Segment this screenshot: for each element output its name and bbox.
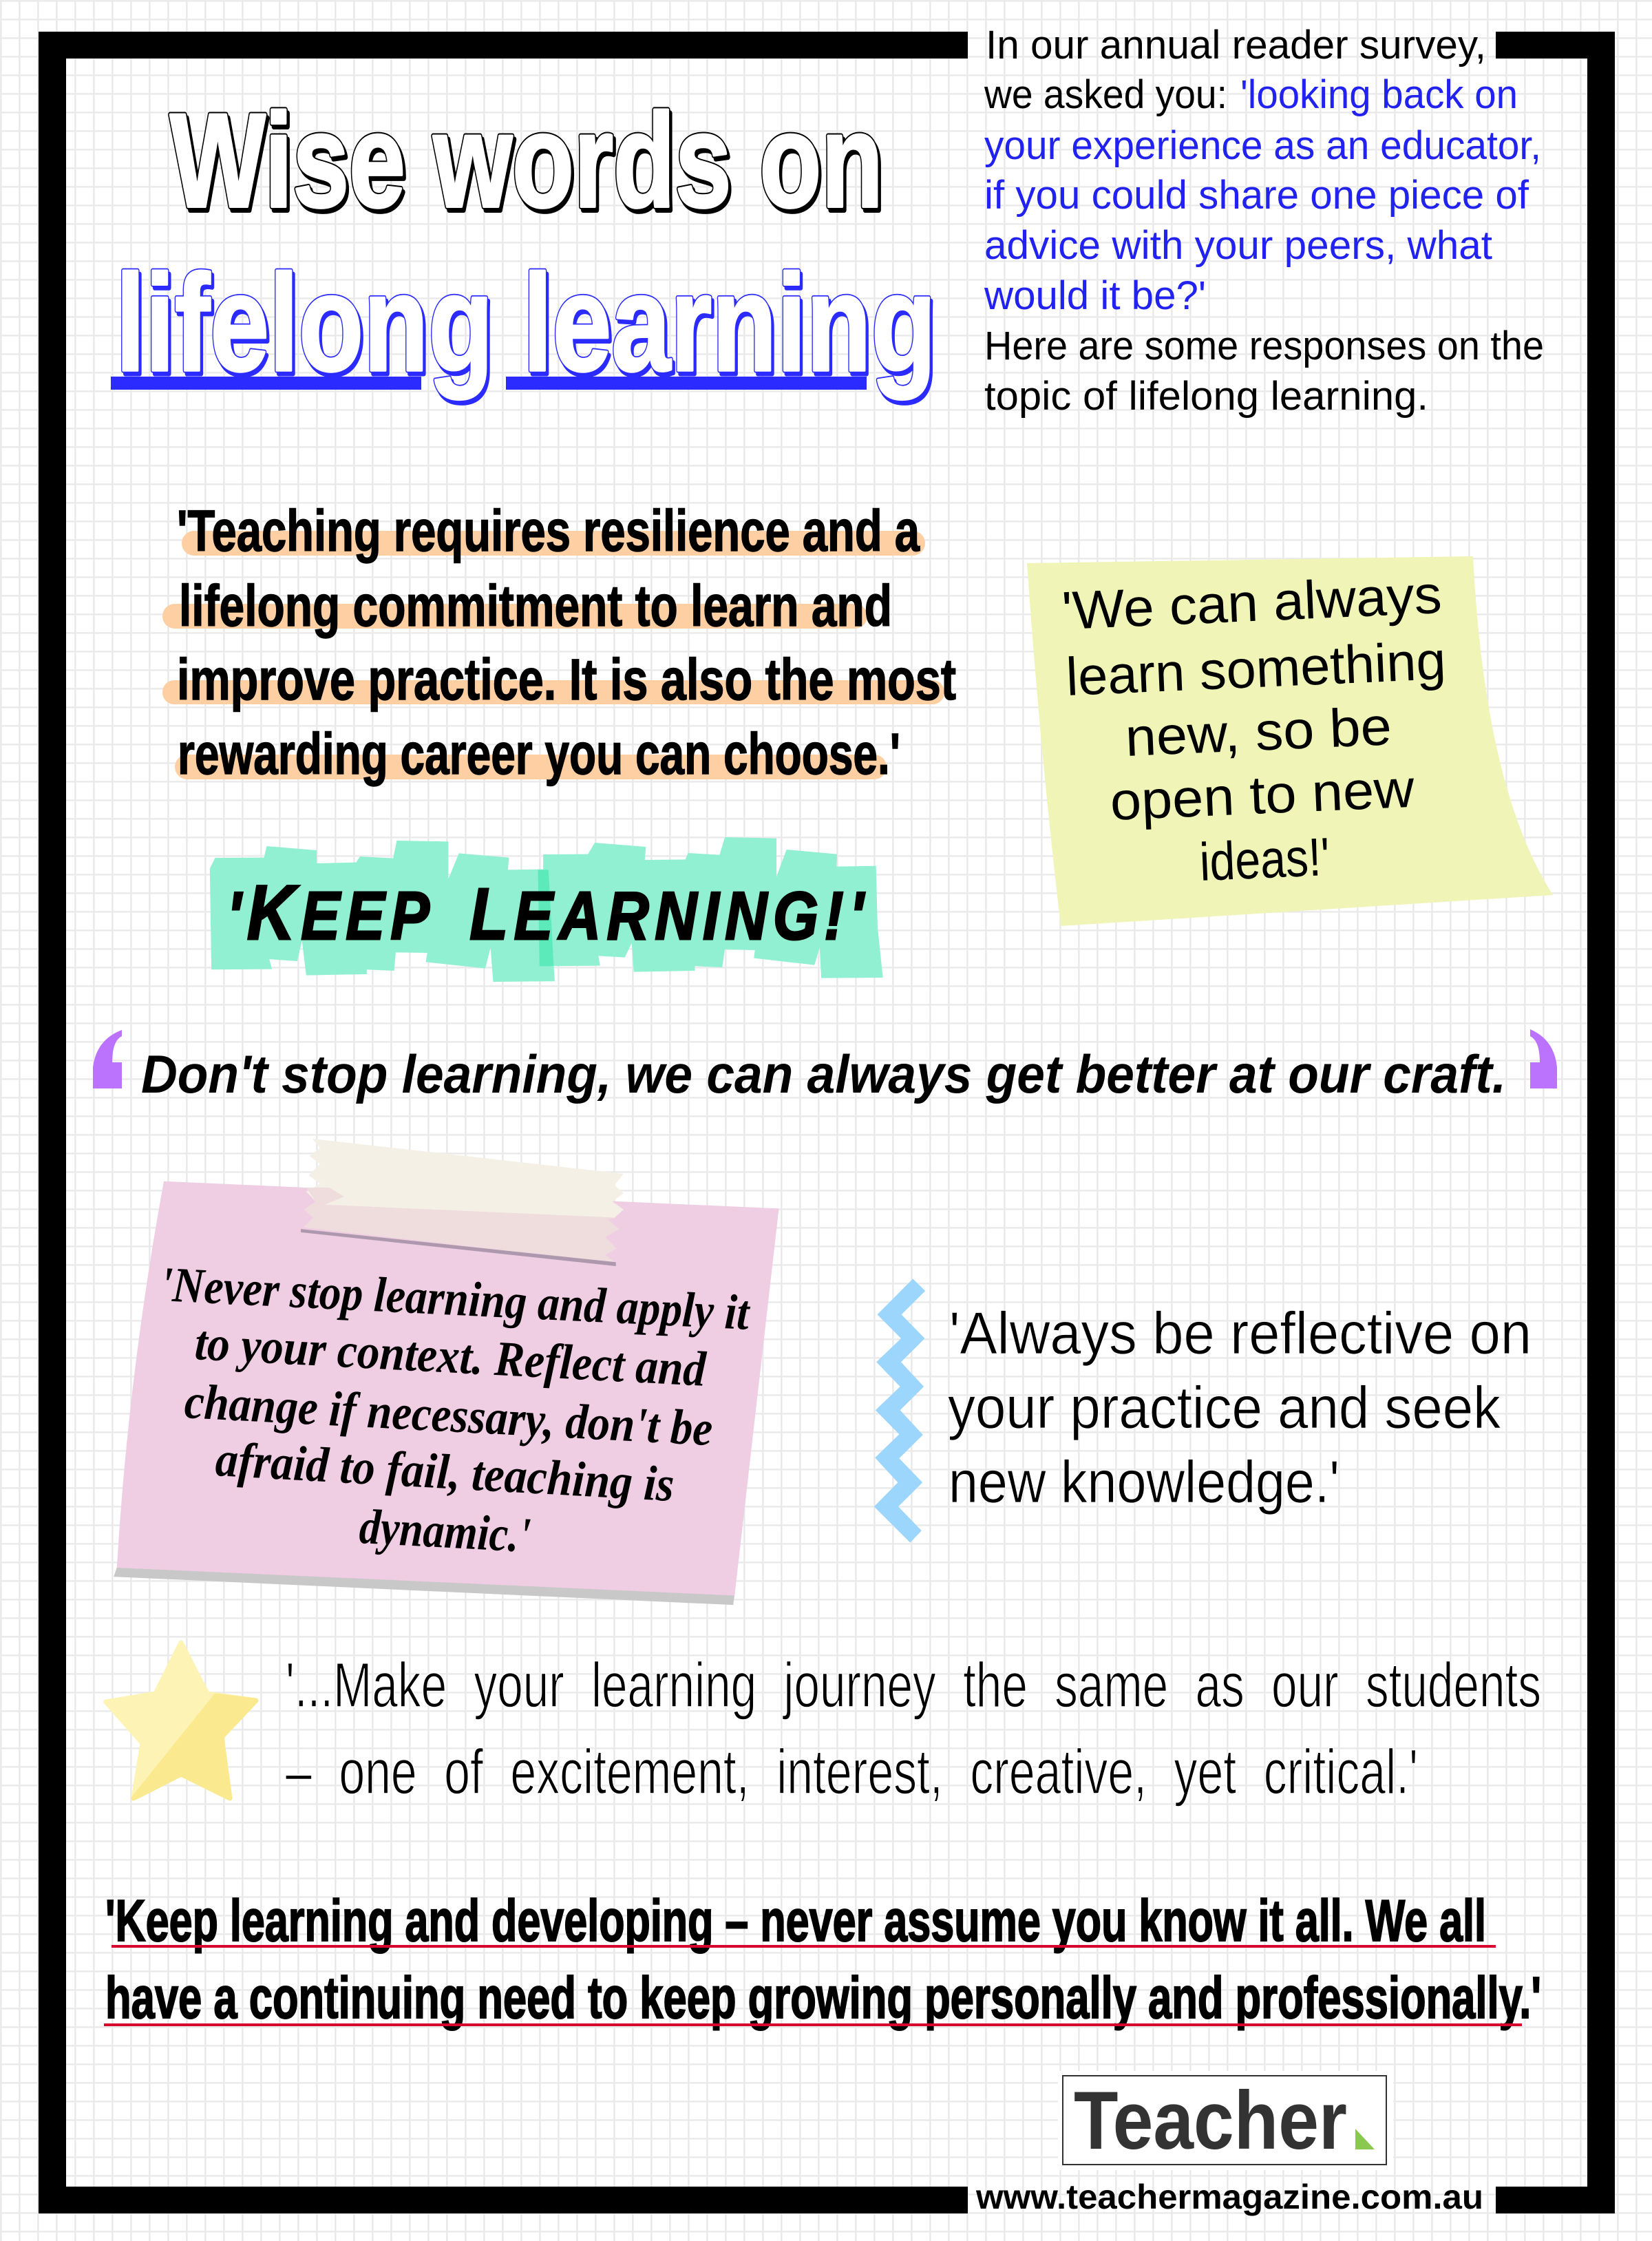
intro text block: Here are some responses on the xyxy=(984,324,1544,368)
quote: resilience with orange highlights xyxy=(162,498,956,786)
title line: Wise words on: Wise words on xyxy=(172,90,885,239)
title line: Wise words on: Wise words on xyxy=(170,86,883,235)
note text: change if necessary, don't be xyxy=(183,1374,714,1456)
title line: lifelong learning: lifelong learning xyxy=(116,246,936,400)
note text: afraid to fail, teaching is xyxy=(214,1431,676,1512)
intro text block: topic of lifelong learning. xyxy=(984,374,1428,419)
note text: ideas!' xyxy=(1198,826,1331,892)
note text xyxy=(1061,564,1447,892)
logo: Teacher: Teacher xyxy=(1074,2074,1347,2167)
quote text xyxy=(105,1888,1541,2031)
note paper xyxy=(1027,556,1553,926)
website url: www.teachermagazine.com.au xyxy=(975,2178,1483,2216)
title xyxy=(111,86,938,403)
intro text block: would it be?' xyxy=(984,273,1206,318)
quote: always be reflective xyxy=(948,1301,1532,1515)
note paper and tape xyxy=(114,1139,779,1605)
quote text xyxy=(177,498,956,786)
note text xyxy=(159,1256,752,1563)
pull quote with purple brackets xyxy=(93,1029,1557,1104)
intro text block: your experience as an educator, xyxy=(984,123,1541,168)
note text: learn something xyxy=(1065,630,1447,707)
title line: lifelong learning: lifelong learning xyxy=(118,250,938,403)
intro text block: In our annual reader survey, xyxy=(986,23,1486,67)
title underline bars xyxy=(111,377,867,390)
note text: open to new xyxy=(1109,758,1416,832)
title line: lifelong learning: lifelong learning xyxy=(116,246,936,400)
quote text: rewarding career you can choose.' xyxy=(178,722,900,786)
intro text block: advice with your peers, what xyxy=(984,223,1492,268)
icon: yellow star xyxy=(106,1643,256,1798)
green tape strips xyxy=(210,837,883,982)
note text: 'Never stop learning and apply it xyxy=(159,1256,752,1340)
pink taped note xyxy=(114,1139,779,1605)
callout text: 'KEEP LEARNING!' xyxy=(227,870,869,956)
red underlines xyxy=(104,1945,1522,2026)
intro text block: 'looking back on xyxy=(1240,72,1518,117)
intro text block: we asked you: xyxy=(984,72,1227,117)
quote: always be reflective: your practice and seek xyxy=(948,1375,1501,1441)
note text: 'We can always xyxy=(1061,564,1443,641)
note text: dynamic.' xyxy=(358,1499,532,1563)
icon: blue zigzag xyxy=(874,1279,925,1543)
orange highlight strokes xyxy=(162,531,944,779)
quote text: 'Teaching requires resilience and a xyxy=(177,498,920,563)
intro text block: if you could share one piece of xyxy=(984,173,1529,218)
quote: always be reflective: 'Always be reflective on xyxy=(949,1301,1532,1367)
note text: new, so be xyxy=(1124,695,1392,768)
sticky note: yellow xyxy=(1027,556,1553,926)
icon: right bracket xyxy=(1530,1029,1557,1088)
icon: left bracket xyxy=(93,1030,122,1088)
pull quote text: Don't stop learning, we can always get better at our craft. xyxy=(141,1044,1506,1104)
callout: Keep learning on green tape xyxy=(210,837,883,982)
quote: keep learning and developing with red underlines xyxy=(104,1888,1541,2031)
note text: to your context. Reflect and xyxy=(193,1315,708,1397)
intro text block xyxy=(984,23,1544,419)
title line: Wise words on: Wise words on xyxy=(170,86,883,235)
quote text: improve practice. It is also the most xyxy=(177,647,956,712)
quote: always be reflective: new knowledge.' xyxy=(949,1449,1339,1515)
quote text: lifelong commitment to learn and xyxy=(179,574,892,638)
quote: learning journey xyxy=(286,1650,1541,1807)
